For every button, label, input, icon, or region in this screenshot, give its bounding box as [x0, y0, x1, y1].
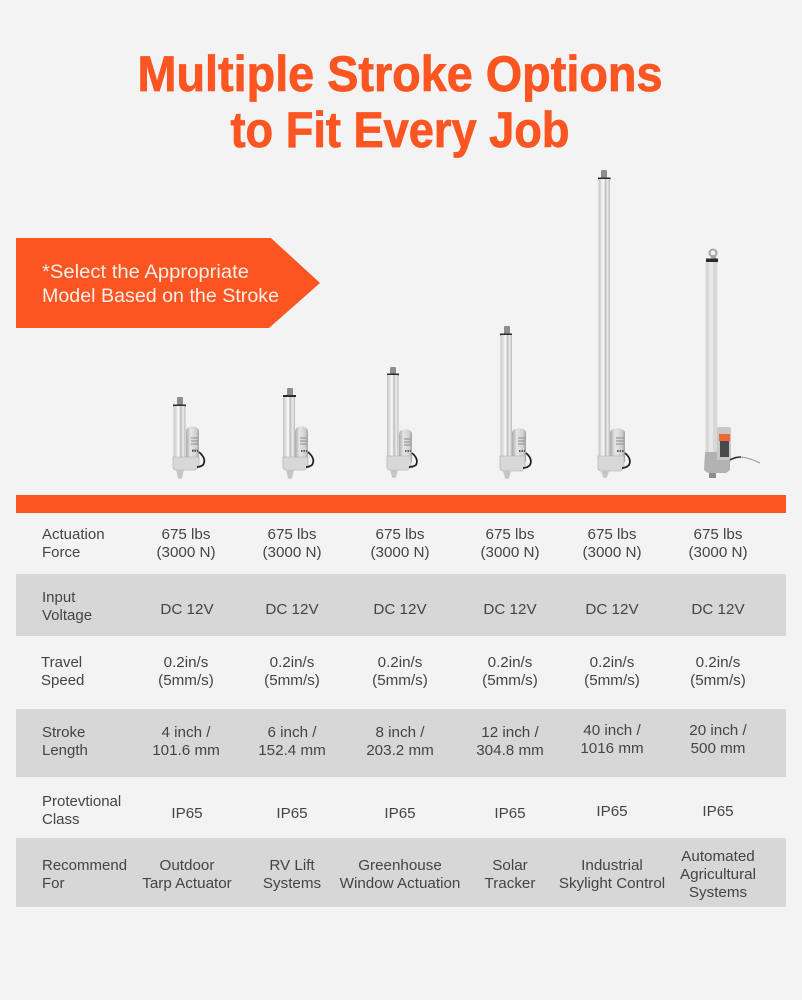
actuator: 4 inch: [173, 397, 204, 479]
table row: actuation force: 675 lbs: [268, 526, 317, 543]
table row: recommend for: Agricultural: [680, 866, 756, 883]
table row: protection class: IP65: [384, 805, 416, 822]
table row: actuation force: (3000 N): [156, 544, 216, 561]
table row: input voltage: DC 12V: [160, 601, 214, 618]
table row: stroke length: 12 inch /: [481, 724, 539, 741]
table row: travel speed: (5mm/s): [264, 672, 320, 689]
table row: recommend for: Greenhouse: [358, 857, 442, 874]
table row: travel speed: (5mm/s): [584, 672, 640, 689]
table row: recommend for: Recommend: [42, 857, 127, 874]
callout: select model arrow: Model Based on the Stroke: [42, 285, 279, 307]
table row: actuation force: (3000 N): [582, 544, 642, 561]
table row: protection class: Protevtional: [42, 793, 121, 810]
table row: stroke length: 203.2 mm: [366, 742, 434, 759]
table row: stroke length: 20 inch /: [689, 722, 747, 739]
table row: input voltage: DC 12V: [265, 601, 319, 618]
table row: travel speed: 0.2in/s: [164, 654, 209, 671]
table row: protection class: [42, 793, 734, 828]
callout: select model arrow: *Select the Appropriate: [42, 261, 249, 283]
table row: recommend for: Tarp Actuator: [142, 875, 232, 892]
table row: stroke length: 8 inch /: [376, 724, 425, 741]
table row: travel speed: (5mm/s): [482, 672, 538, 689]
table row: stroke length: 304.8 mm: [476, 742, 544, 759]
table row: actuation force: (3000 N): [480, 544, 540, 561]
table row: recommend for: RV Lift: [269, 857, 315, 874]
table row: stroke length: 152.4 mm: [258, 742, 326, 759]
table row: travel speed: 0.2in/s: [488, 654, 533, 671]
table row: protection class: IP65: [171, 805, 203, 822]
table row: input voltage: [16, 574, 786, 636]
table row: stroke length: [16, 709, 786, 777]
table row: travel speed: (5mm/s): [690, 672, 746, 689]
table row: recommend for: Outdoor: [160, 857, 214, 874]
title: [138, 46, 662, 158]
table row: actuation force: (3000 N): [370, 544, 430, 561]
table row: input voltage: DC 12V: [691, 601, 745, 618]
table row: stroke length: 500 mm: [691, 740, 745, 757]
table row: protection class: IP65: [596, 803, 628, 820]
actuator: 8 inch: [387, 367, 417, 478]
table row: input voltage: DC 12V: [483, 601, 537, 618]
table row: travel speed: 0.2in/s: [590, 654, 635, 671]
table row: stroke length: 40 inch /: [583, 722, 641, 739]
table row: recommend for: Solar: [492, 857, 528, 874]
table row: stroke length: 101.6 mm: [152, 742, 220, 759]
table row: recommend for: Automated: [681, 848, 755, 865]
table row: recommend for: Systems: [689, 884, 748, 901]
table row: recommend for: Window Actuation: [340, 875, 460, 892]
table row: recommend for: [16, 838, 786, 907]
table row: recommend for: For: [42, 875, 65, 892]
table row: recommend for: Systems: [263, 875, 322, 892]
actuator: 20 inch with controller: [704, 250, 760, 478]
table row: actuation force: Actuation: [42, 526, 105, 543]
table row: travel speed: 0.2in/s: [270, 654, 315, 671]
table row: travel speed: 0.2in/s: [378, 654, 423, 671]
table row: actuation force: 675 lbs: [376, 526, 425, 543]
table row: actuation force: [42, 526, 748, 561]
table row: protection class: IP65: [276, 805, 308, 822]
title: to Fit Every Job: [230, 102, 570, 158]
table row: travel speed: Travel: [41, 654, 82, 671]
table row: recommend for: Tracker: [485, 875, 535, 892]
table row: protection class: Class: [42, 811, 80, 828]
table row: stroke length: Stroke: [42, 724, 85, 741]
orange divider bar: [16, 495, 786, 513]
actuator: 40 inch: [598, 170, 630, 478]
table row: actuation force: 675 lbs: [162, 526, 211, 543]
table row: actuation force: (3000 N): [262, 544, 322, 561]
table row: stroke length: Length: [42, 742, 88, 759]
table row: stroke length: 1016 mm: [580, 740, 644, 757]
table row: travel speed: Speed: [41, 672, 84, 689]
table row: protection class: IP65: [702, 803, 734, 820]
table row: actuation force: 675 lbs: [588, 526, 637, 543]
table row: travel speed: [41, 654, 746, 689]
table row: recommend for: Industrial: [581, 857, 643, 874]
table row: input voltage: DC 12V: [373, 601, 427, 618]
actuator: 12 inch: [500, 326, 531, 479]
title: Multiple Stroke Options: [138, 46, 662, 102]
actuator: 6 inch: [283, 388, 313, 479]
table row: stroke length: 6 inch /: [268, 724, 317, 741]
table row: travel speed: 0.2in/s: [696, 654, 741, 671]
table row: input voltage: DC 12V: [585, 601, 639, 618]
table row: actuation force: Force: [42, 544, 80, 561]
table row: recommend for: Skylight Control: [559, 875, 665, 892]
table row: stroke length: 4 inch /: [162, 724, 211, 741]
table row: travel speed: (5mm/s): [372, 672, 428, 689]
table row: actuation force: 675 lbs: [694, 526, 743, 543]
table row: actuation force: 675 lbs: [486, 526, 535, 543]
table row: input voltage: Input: [42, 589, 76, 606]
table row: travel speed: (5mm/s): [158, 672, 214, 689]
table row: actuation force: (3000 N): [688, 544, 748, 561]
table row: input voltage: Voltage: [42, 607, 92, 624]
table row: protection class: IP65: [494, 805, 526, 822]
callout: select model arrow: [16, 238, 320, 328]
